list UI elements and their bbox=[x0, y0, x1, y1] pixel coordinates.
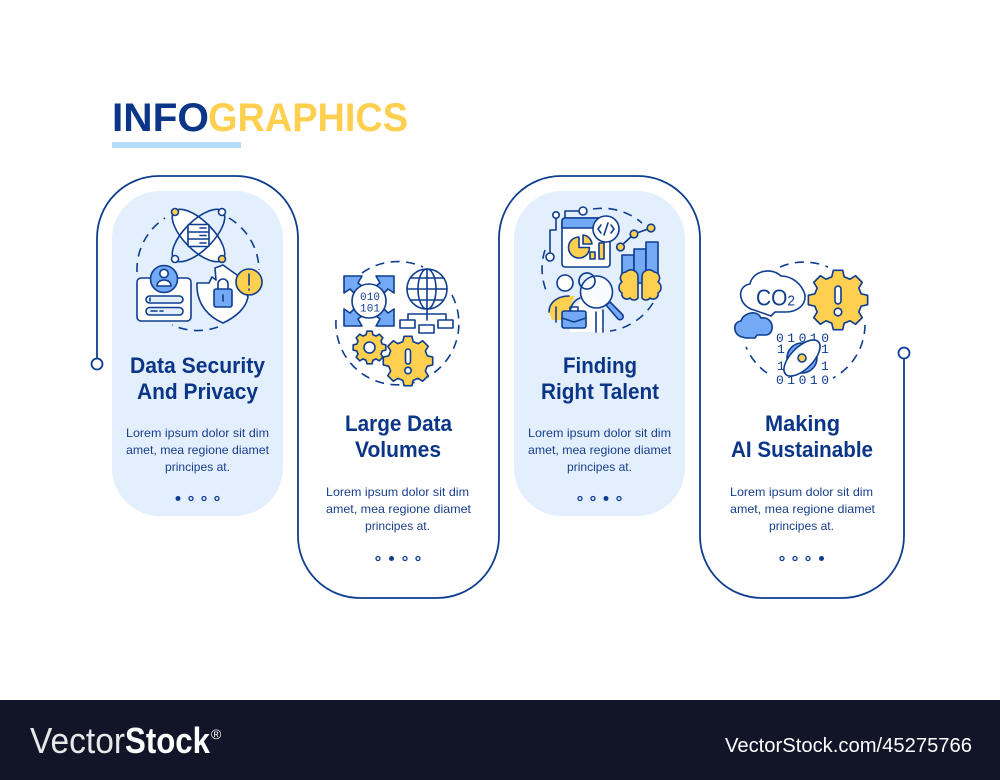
text block: card 4: Lorem ipsum dolor sit dim bbox=[730, 485, 873, 499]
icon: large data volumes: 010 bbox=[360, 292, 380, 304]
text block: card 2: principes at. bbox=[365, 519, 430, 533]
icon: making AI sustainable: 01010 bbox=[776, 373, 829, 388]
heading: card 2: Volumes bbox=[355, 437, 441, 462]
connector outline bbox=[92, 176, 910, 598]
icon: making AI sustainable bbox=[735, 262, 868, 388]
title: GRAPHICS bbox=[208, 96, 408, 140]
text block: card 1: Lorem ipsum dolor sit dim bbox=[126, 426, 269, 440]
title bbox=[112, 96, 408, 140]
heading: card 3: Finding bbox=[563, 353, 637, 378]
title underline bbox=[112, 142, 241, 148]
icon: finding right talent bbox=[542, 207, 661, 332]
text block: card 4: principes at. bbox=[769, 519, 834, 533]
heading: card 2: Large Data bbox=[345, 411, 453, 436]
pagination dots: card 2 bbox=[376, 556, 420, 561]
text block: card 4 bbox=[730, 485, 876, 533]
icon: making AI sustainable: CO2 bbox=[756, 284, 795, 310]
text block: card 3: amet, mea regione diamet bbox=[528, 443, 672, 457]
text block: card 2: amet, mea regione diamet bbox=[326, 502, 472, 516]
footer logo: Vector bbox=[30, 720, 125, 761]
icon: making AI sustainable: 01010 bbox=[776, 331, 829, 346]
panel: background card 1 bbox=[112, 191, 283, 516]
icon: making AI sustainable: 1 bbox=[777, 359, 785, 374]
text block: card 1 bbox=[126, 426, 270, 474]
icon: making AI sustainable: 1 bbox=[821, 359, 829, 374]
text block: card 1: amet, mea regione diamet bbox=[126, 443, 270, 457]
icon: large data volumes: 101 bbox=[360, 304, 380, 316]
title: INFO bbox=[112, 96, 209, 140]
footer logo bbox=[30, 720, 222, 761]
heading: card 1 bbox=[130, 353, 266, 404]
panel: background card 3 bbox=[514, 191, 685, 516]
footer logo: ® bbox=[211, 726, 222, 742]
heading: card 3: Right Talent bbox=[541, 379, 660, 404]
heading: card 4 bbox=[731, 411, 873, 462]
footer bar bbox=[0, 700, 1000, 780]
footer logo: Stock bbox=[125, 720, 211, 761]
text block: card 1: principes at. bbox=[165, 460, 230, 474]
text block: card 2: Lorem ipsum dolor sit dim bbox=[326, 485, 469, 499]
text block: card 3 bbox=[528, 426, 672, 474]
pagination dots: card 4 bbox=[780, 556, 824, 561]
heading: card 4: AI Sustainable bbox=[731, 437, 873, 462]
text block: card 2 bbox=[326, 485, 472, 533]
text block: card 3: Lorem ipsum dolor sit dim bbox=[528, 426, 671, 440]
icon: making AI sustainable: 1 bbox=[821, 342, 829, 357]
icon: large data volumes bbox=[336, 262, 459, 386]
heading: card 1: Data Security bbox=[130, 353, 266, 378]
heading: card 2 bbox=[345, 411, 453, 462]
icon: making AI sustainable: 1 bbox=[777, 342, 785, 357]
footer image id: VectorStock.com/45275766 bbox=[725, 735, 972, 757]
text block: card 3: principes at. bbox=[567, 460, 632, 474]
pagination dots: card 1 bbox=[176, 496, 219, 501]
icon: data security bbox=[137, 201, 262, 331]
pagination dots: card 3 bbox=[578, 496, 621, 501]
heading: card 1: And Privacy bbox=[137, 379, 259, 404]
text block: card 4: amet, mea regione diamet bbox=[730, 502, 876, 516]
heading: card 3 bbox=[541, 353, 660, 404]
heading: card 4: Making bbox=[765, 411, 840, 436]
